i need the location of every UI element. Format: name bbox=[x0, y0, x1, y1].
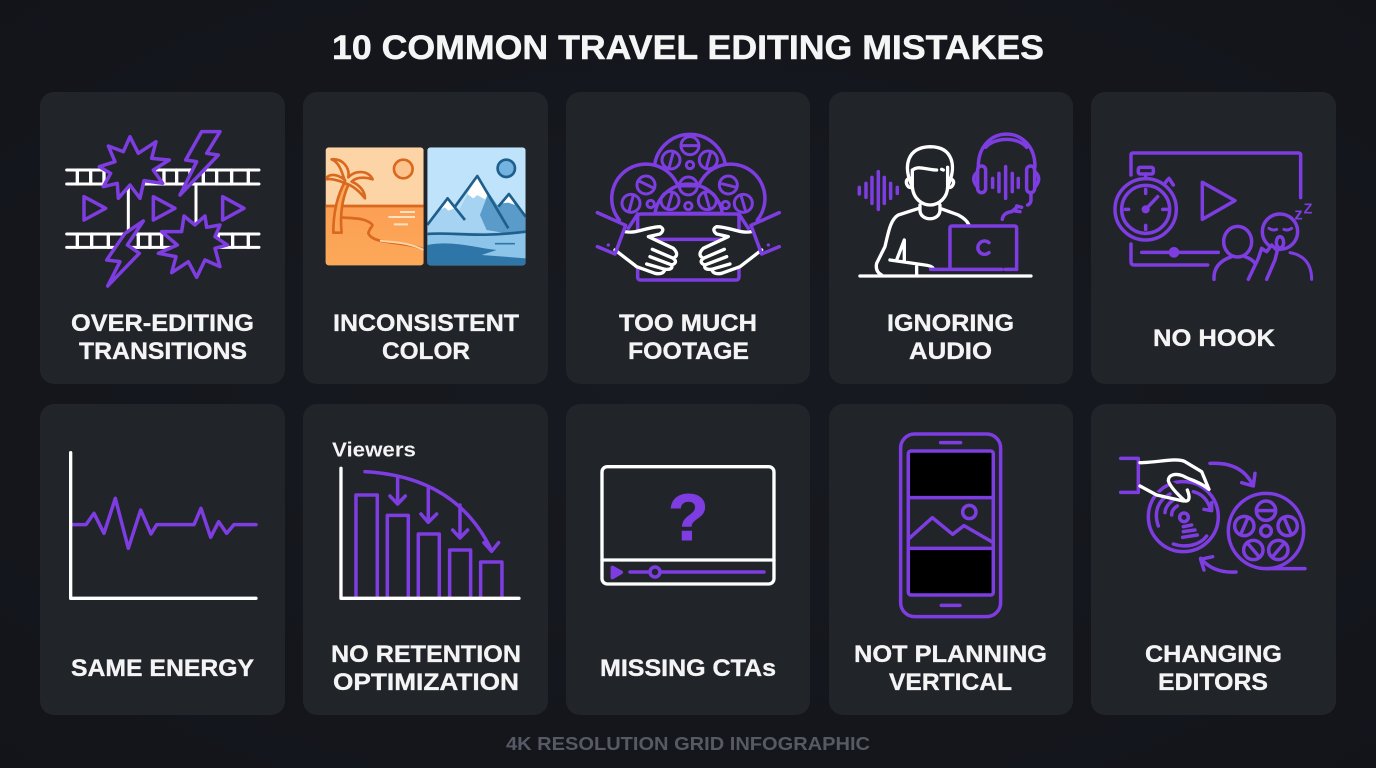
icon: film strips with bursts bbox=[67, 132, 259, 286]
title: 10 COMMON TRAVEL EDITING MISTAKES bbox=[332, 29, 1044, 67]
label line 2: TRANSITIONS bbox=[79, 338, 247, 365]
panel: too much footage bbox=[566, 92, 810, 384]
label line 2: AUDIO bbox=[909, 338, 992, 365]
label line 2: COLOR bbox=[382, 338, 470, 365]
label: SAME ENERGY bbox=[71, 655, 254, 682]
panel: changing editors bbox=[1091, 404, 1336, 715]
panel: ignoring audio bbox=[829, 92, 1073, 384]
label line 2: EDITORS bbox=[1158, 669, 1268, 696]
panel: same energy bbox=[40, 404, 285, 715]
label: MISSING CTAs bbox=[600, 655, 776, 682]
label: NO RETENTION bbox=[331, 641, 521, 668]
label: OVER-EDITING bbox=[71, 310, 254, 337]
panel: no hook bbox=[1091, 92, 1336, 384]
label: CHANGING bbox=[1145, 641, 1282, 668]
panel: missing ctas bbox=[566, 404, 810, 715]
icon: hand swapping disc and film reel bbox=[1121, 458, 1305, 572]
panel: inconsistent color bbox=[303, 92, 548, 384]
icon text: sleeping z: z bbox=[1294, 204, 1303, 223]
footer caption: 4K RESOLUTION GRID INFOGRAPHIC bbox=[506, 734, 870, 754]
label line 2: FOOTAGE bbox=[628, 338, 749, 365]
label line 2: OPTIMIZATION bbox=[333, 669, 519, 696]
label: NOT PLANNING bbox=[854, 641, 1047, 668]
icon text: sleeping Z: Z bbox=[1304, 201, 1313, 217]
label line 2: VERTICAL bbox=[889, 669, 1012, 696]
label: INCONSISTENT bbox=[333, 310, 519, 337]
label: TOO MUCH bbox=[619, 310, 757, 337]
icon: flat line chart bbox=[71, 453, 256, 598]
panel: not planning vertical bbox=[829, 404, 1073, 715]
icon: stopwatch, play frame and yawning viewers bbox=[1115, 153, 1313, 279]
icon: pile of film reels held by hands bbox=[597, 134, 779, 280]
icon: warm beach and cool mountain split bbox=[326, 147, 526, 265]
chart label: Viewers bbox=[332, 439, 416, 461]
label: NO HOOK bbox=[1153, 325, 1275, 352]
question mark: ? bbox=[668, 480, 708, 554]
label: IGNORING bbox=[887, 310, 1014, 337]
chart: falling viewer bars bbox=[332, 439, 519, 598]
icon: video player with question mark bbox=[602, 467, 774, 584]
icon: editor at laptop with headphones and sound waves bbox=[859, 134, 1039, 276]
icon: phone with letterboxed video bbox=[901, 434, 1001, 617]
panel: no retention optimization bbox=[303, 404, 548, 715]
panel: over-editing transitions bbox=[40, 92, 285, 384]
